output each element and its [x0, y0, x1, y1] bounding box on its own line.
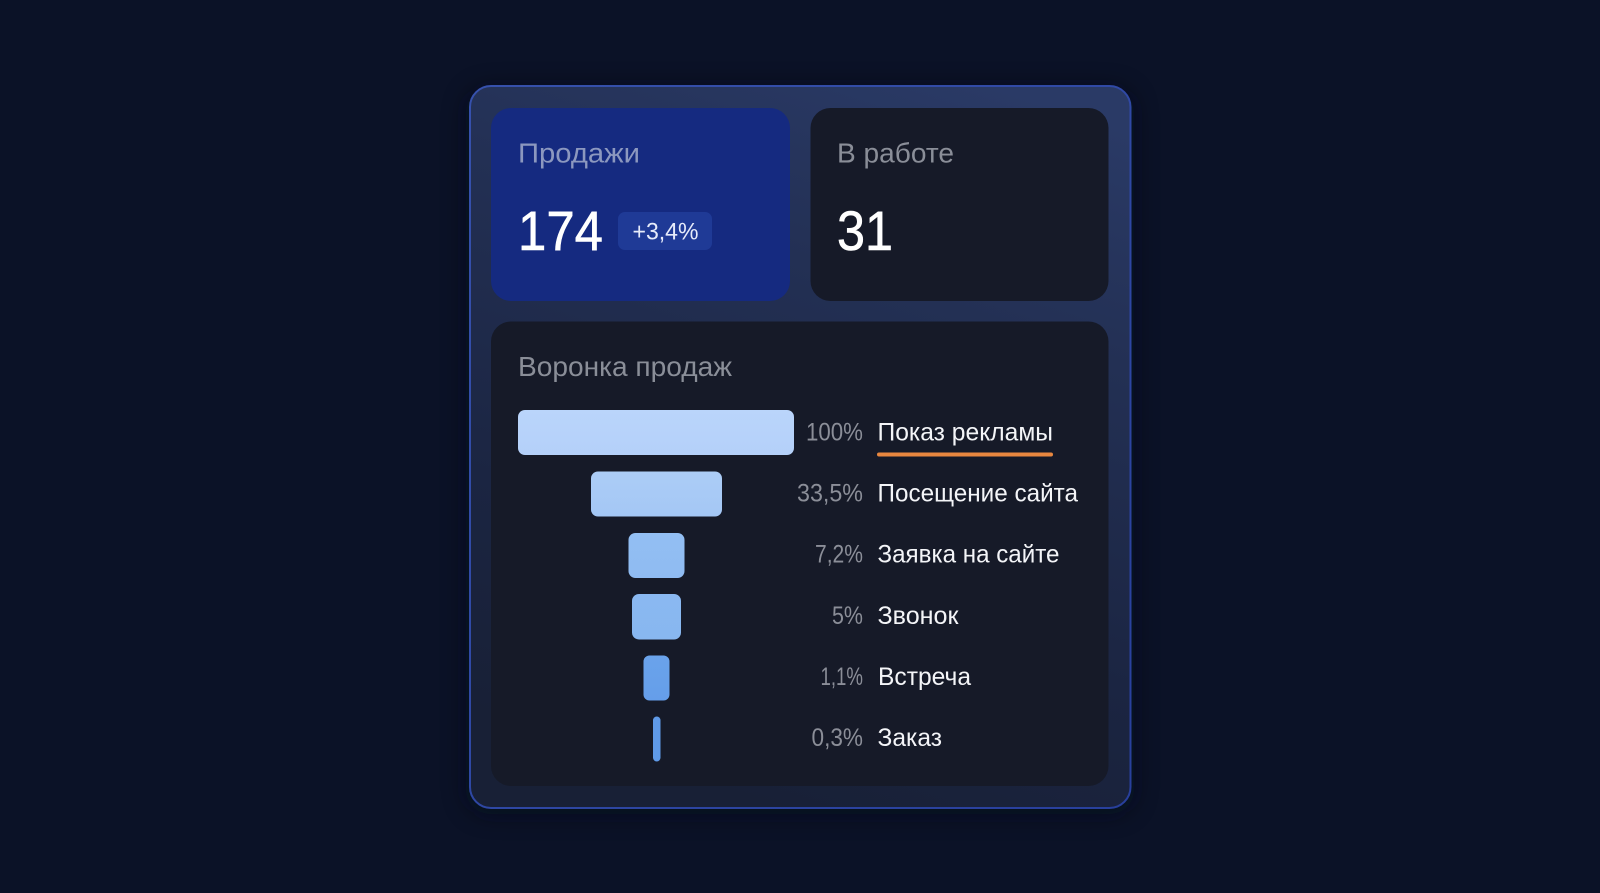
heading: in progress: В работе: [837, 138, 954, 168]
row: calls: 5%: [832, 602, 863, 630]
value: in progress count: 31: [837, 199, 893, 262]
row: orders: [812, 724, 942, 752]
badge: sales growth: +3,4%: [632, 218, 698, 246]
bar: 100%: [518, 410, 794, 455]
card shadow: [466, 88, 1134, 814]
row: calls: [832, 602, 960, 630]
bar: 7,2%: [628, 533, 684, 578]
bar: 1,1%: [644, 656, 670, 700]
row: meetings: 1,1%: [820, 663, 863, 691]
heading: sales funnel: Воронка продаж: [518, 351, 732, 382]
row: site visits: 33,5%: [797, 480, 863, 508]
heading: sales: Продажи: [518, 138, 640, 168]
bar: 0,3%: [653, 716, 660, 762]
row: ad impressions: Показ рекламы: [878, 418, 1053, 446]
row: site visits: Посещение сайта: [878, 480, 1078, 508]
funnel bar chart: [518, 410, 794, 762]
row: orders: 0,3%: [812, 724, 863, 752]
row: ad impressions: 100%: [806, 418, 863, 446]
row: orders: Заказ: [878, 724, 942, 752]
badge: sales growth: [618, 212, 712, 250]
panel: outer dashboard frame: [470, 86, 1130, 808]
row: site requests: 7,2%: [815, 540, 863, 568]
row: meetings: Встреча: [878, 663, 971, 691]
panel: sales: [491, 108, 790, 301]
panel: in progress: [810, 108, 1108, 301]
row: site visits: [797, 480, 1078, 508]
bar: 33,5%: [591, 472, 722, 516]
row: calls: Звонок: [878, 602, 960, 630]
value: sales count: 174: [518, 199, 603, 262]
bar: 5%: [632, 594, 681, 640]
row: site requests: Заявка на сайте: [878, 540, 1060, 568]
underline: highlighted stage: [877, 452, 1053, 456]
panel: sales funnel: [491, 322, 1108, 786]
row: meetings: [820, 663, 971, 691]
